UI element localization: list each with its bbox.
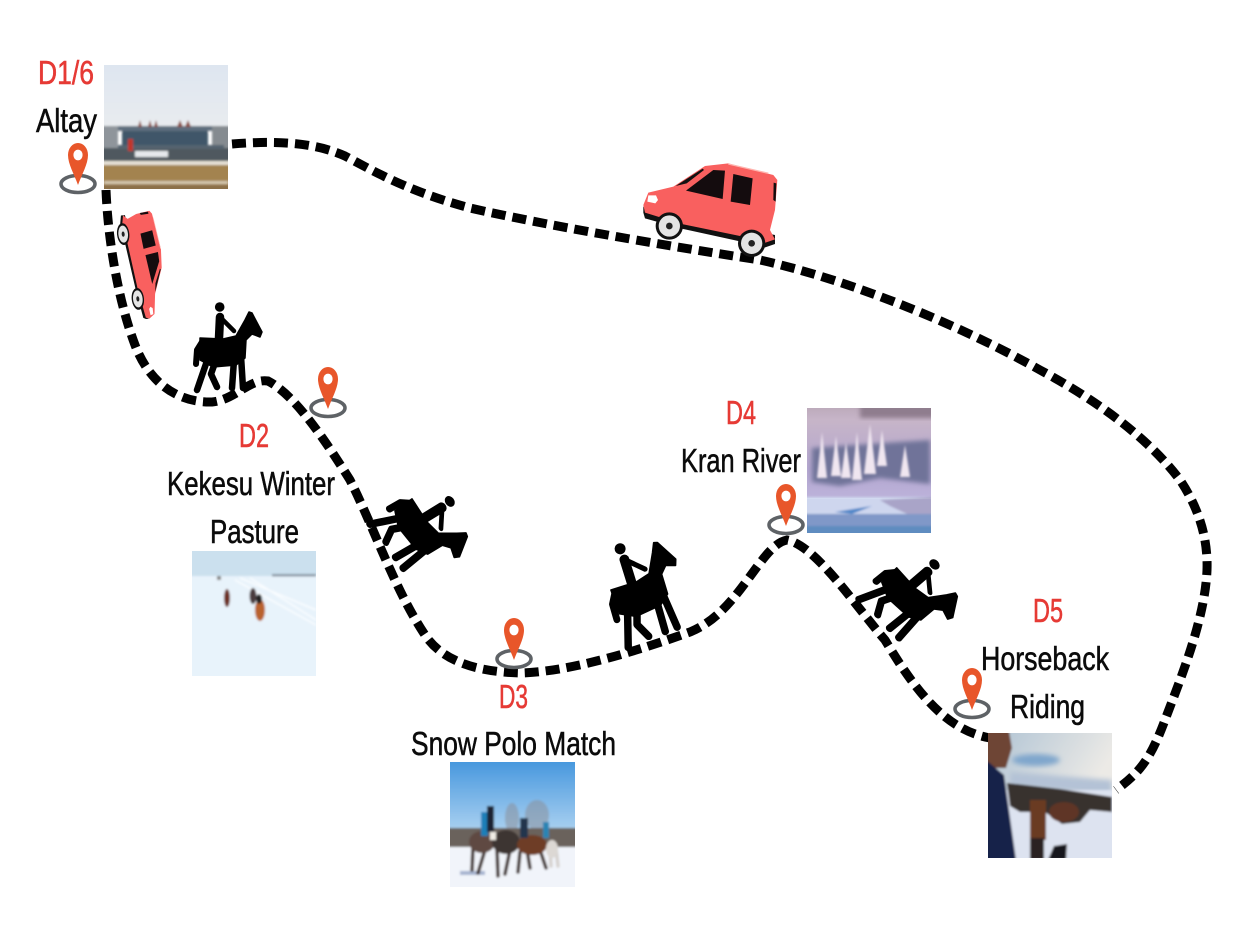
photo: Altay airport [104,65,228,189]
route: return dashed road back to Altay [232,142,1207,790]
route: outbound dashed road from Altay through all stops [106,190,990,738]
icon: horse and rider 1 [196,302,262,390]
photo: horseback riding herd [988,733,1112,858]
label: D2 Kekesu Winter Pasture: Kekesu Winter [167,465,335,502]
label: D2 Kekesu Winter Pasture: D2 [239,417,269,454]
icon: horse and rider 2 [369,475,483,588]
label: D2 Kekesu Winter Pasture [167,417,335,550]
icon: red car on return road [643,163,777,257]
label: D1/6 Altay: Altay [36,102,97,139]
icon: horse and rider 4 [858,541,973,656]
photo: Kran River [807,408,931,533]
label: D3 Snow Polo Match: D3 [499,678,528,715]
photo: snow polo match [450,762,575,887]
label: D2 Kekesu Winter Pasture: Pasture [210,513,299,550]
label: D5 Horseback Riding: Riding [1010,688,1085,725]
label: D3 Snow Polo Match: Snow Polo Match [411,725,616,762]
label: D4 Kran River [681,394,801,479]
icon: map pin Altay [61,143,95,192]
icon: red car descending from Altay [115,210,168,321]
label: D5 Horseback Riding: Horseback [981,640,1109,677]
label: D5 Horseback Riding [981,592,1109,725]
label: D1/6 Altay: D1/6 [38,54,94,91]
label: D1/6 Altay [36,54,97,139]
icon: map pin Kran River [769,484,803,534]
label: D3 Snow Polo Match [411,678,616,762]
icon: map pin Horseback Riding [955,668,989,718]
photo: Kekesu winter pasture [192,551,316,676]
label: D5 Horseback Riding: D5 [1033,592,1063,629]
label: D4 Kran River: Kran River [681,442,801,479]
icon: map pin Kekesu [311,367,345,416]
icon: map pin Snow Polo [497,618,531,668]
label: D4 Kran River: D4 [726,394,756,431]
icon: horse and rider 3 [593,527,698,648]
